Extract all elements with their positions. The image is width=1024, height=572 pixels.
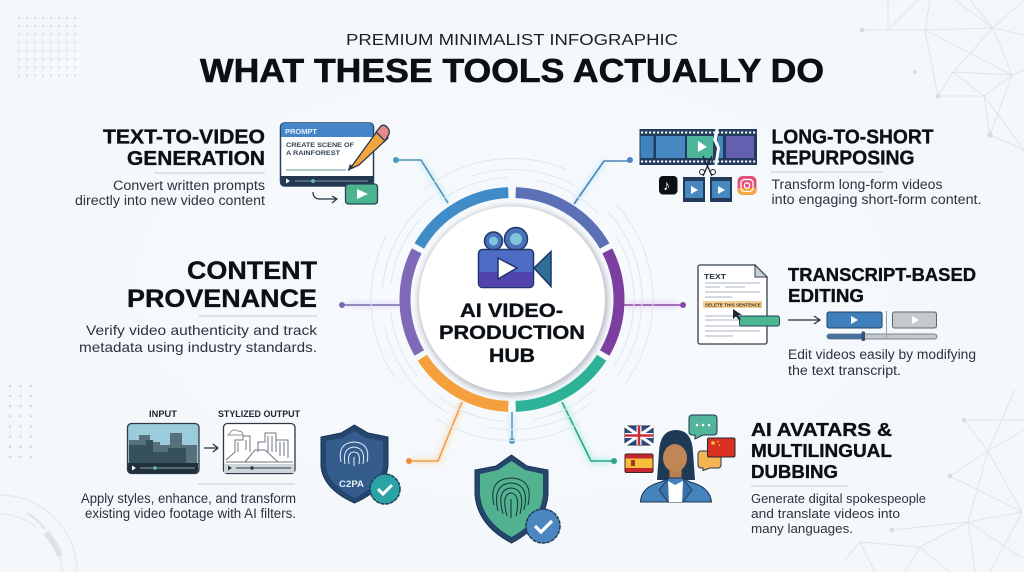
description: Edit videos easily by modifying	[788, 347, 976, 362]
icon: check badge	[370, 474, 400, 504]
description	[75, 178, 265, 208]
hub label: PRODUCTION	[439, 322, 585, 344]
heading: TRANSCRIPT-BASED	[788, 265, 976, 285]
ring segments	[405, 193, 619, 406]
heading: LONG-TO-SHORT	[772, 126, 934, 148]
icon: prompt window: A RAINFOREST	[286, 150, 340, 157]
hub label	[439, 300, 585, 367]
heading: AI AVATARS &	[751, 420, 892, 440]
icon: green fingerprint shield	[475, 455, 560, 543]
description: many languages.	[751, 521, 853, 536]
description	[788, 347, 976, 378]
icon: prompt window: CREATE SCENE OF	[286, 142, 354, 149]
icon: stylized output frame	[224, 424, 295, 474]
icon: film strip: ♪	[663, 177, 670, 193]
icon: video camera	[478, 228, 551, 288]
description: existing video footage with AI filters.	[85, 506, 296, 521]
heading	[751, 420, 892, 482]
arrow	[204, 444, 218, 452]
heading	[127, 257, 317, 313]
heading: MULTILINGUAL	[751, 441, 892, 461]
heading: TEXT-TO-VIDEO	[103, 126, 265, 148]
description	[751, 491, 926, 536]
header	[200, 32, 824, 89]
hub label: AI VIDEO-	[460, 300, 563, 322]
heading: DUBBING	[751, 462, 838, 482]
heading: REPURPOSING	[772, 146, 914, 170]
icon: C2PA shield	[321, 425, 400, 504]
heading: CONTENT	[187, 257, 317, 285]
description	[81, 491, 296, 521]
heading	[788, 265, 976, 306]
eyebrow: PREMIUM MINIMALIST INFOGRAPHIC	[346, 32, 678, 49]
flag: China	[708, 438, 735, 457]
speech bubble: orange	[698, 451, 721, 470]
description: the text transcript.	[788, 363, 901, 378]
description: Generate digital spokespeople	[751, 491, 926, 506]
panel: text-to-video	[75, 123, 389, 208]
description: into engaging short-form content.	[772, 192, 982, 207]
description	[79, 322, 318, 355]
description: metadata using industry standards.	[79, 339, 317, 355]
description: Transform long-form videos	[772, 177, 943, 192]
icon: prompt window	[280, 123, 389, 204]
description	[772, 177, 982, 207]
panel: stylized output	[81, 409, 300, 521]
heading: PROVENANCE	[127, 285, 317, 313]
person	[640, 430, 712, 502]
labels: STYLIZED OUTPUT	[218, 409, 300, 419]
title: WHAT THESE TOOLS ACTUALLY DO	[200, 52, 824, 89]
labels	[149, 409, 300, 419]
hub	[371, 158, 653, 440]
icon: C2PA shield: C2PA	[339, 479, 365, 489]
icon: film strip	[640, 127, 757, 202]
description: Apply styles, enhance, and transform	[81, 491, 296, 506]
speech bubble: green	[689, 415, 717, 439]
hub label: HUB	[489, 345, 535, 367]
flag: UK	[625, 426, 653, 445]
icon: transcript document: SELETE THIS SENTENCE	[705, 302, 762, 308]
panel: content provenance	[79, 257, 318, 355]
heading: GENERATION	[127, 147, 265, 170]
panel: long-to-short	[640, 126, 982, 207]
labels: INPUT	[149, 409, 178, 419]
flag: Spain	[625, 454, 653, 472]
panel: transcript-based editing	[698, 265, 976, 378]
connectors	[339, 157, 686, 464]
description: Convert written prompts	[113, 178, 265, 193]
icon: input frame	[128, 424, 199, 474]
description: directly into new video content	[75, 193, 265, 208]
icon: check badge	[526, 509, 560, 543]
icon: prompt window: PROMPT	[285, 129, 318, 136]
icon: transcript document	[698, 265, 937, 344]
panel: ai avatars	[625, 415, 926, 536]
icon: transcript document: TEXT	[704, 272, 726, 281]
heading	[772, 126, 934, 170]
description: and translate videos into	[751, 506, 900, 521]
heading: EDITING	[788, 286, 864, 306]
description: Verify video authenticity and track	[86, 322, 318, 338]
icon: avatar with flags	[625, 415, 735, 502]
heading	[103, 126, 265, 170]
